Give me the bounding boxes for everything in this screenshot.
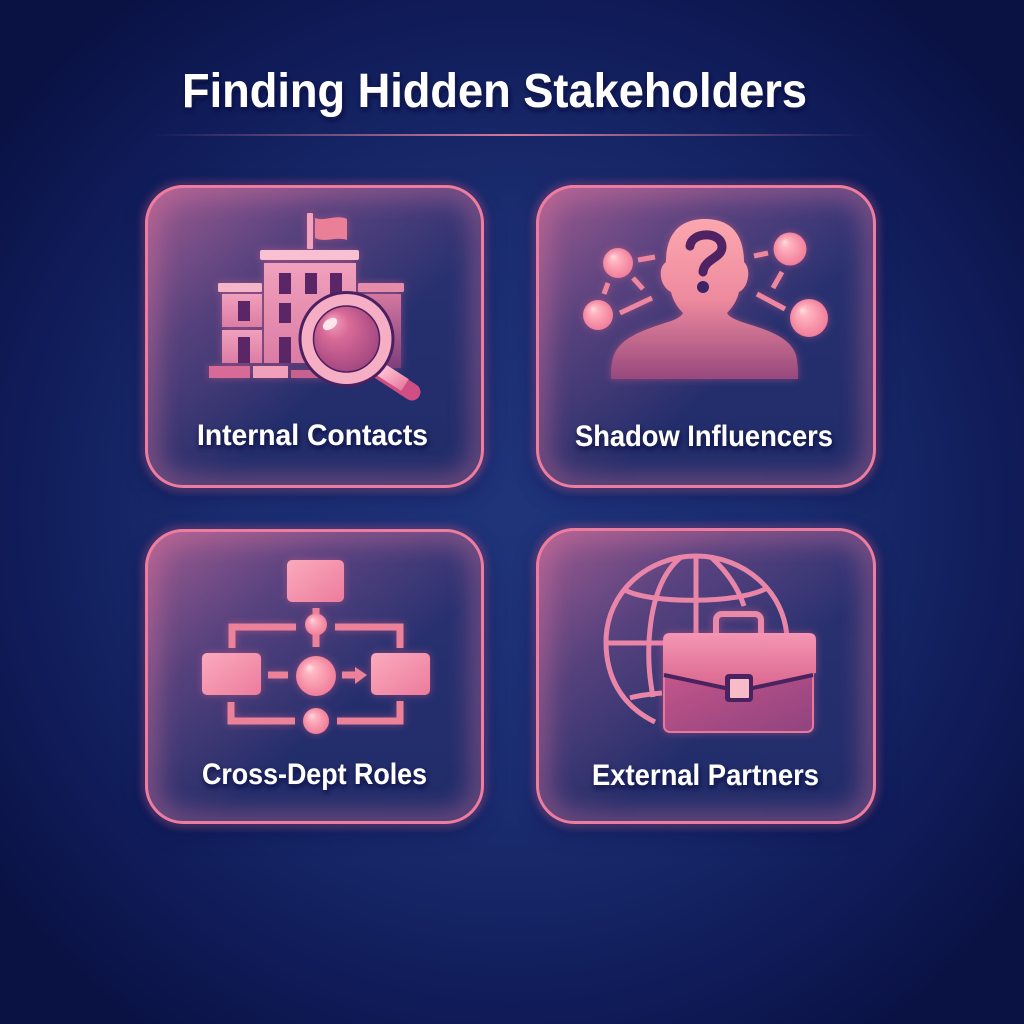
globe [606, 556, 787, 722]
icon: hidden person with network nodes [583, 219, 828, 379]
icon: globe with briefcase [606, 556, 816, 732]
panel: shadow influencers [536, 185, 876, 496]
title: Finding Hidden Stakeholders [182, 65, 807, 118]
panel: external partners [536, 528, 876, 832]
label: internal contacts: Internal Contacts [197, 419, 428, 452]
label: external partners: External Partners [592, 759, 819, 792]
briefcase [663, 614, 816, 732]
panel: internal contacts [145, 185, 484, 496]
label: shadow influencers: Shadow Influencers [575, 420, 833, 453]
network nodes and links [583, 232, 828, 337]
icon: cross-department flowchart [202, 560, 430, 734]
panel: cross-dept roles [145, 529, 484, 832]
label: cross-dept roles: Cross-Dept Roles [202, 758, 427, 791]
silhouette with question mark [611, 219, 798, 379]
icon: building with magnifying glass [209, 213, 412, 392]
